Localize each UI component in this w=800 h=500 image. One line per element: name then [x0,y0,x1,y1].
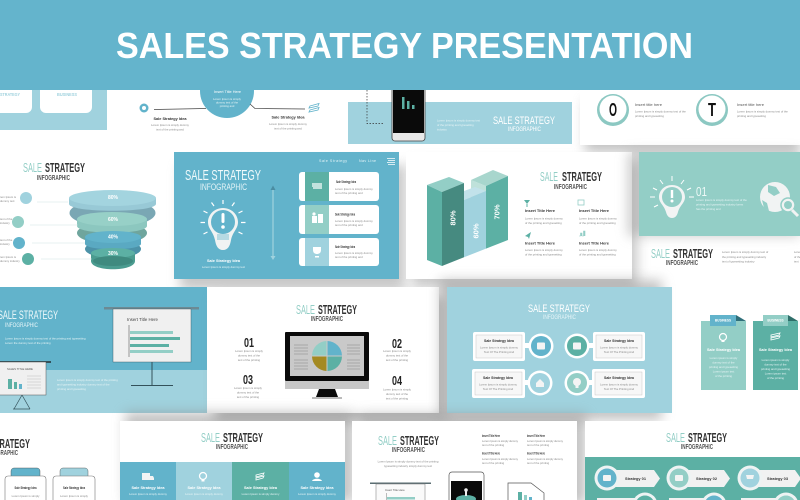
slide: top-center circle diagram: Lorem Ipsum is simply dummy [269,122,307,126]
slide: top phone with light panel: SALE STRATEGY [493,115,555,127]
small projector board: SALES TITLE HERE [7,367,33,371]
slide: phone and document: Insert Title Here [527,434,545,438]
monitor numbered notes: dummy text of the [386,354,409,358]
slide: mint globe slide: 01 [696,184,707,199]
funnel layers [69,190,156,269]
slide: top-left business cards [0,82,107,130]
slide: blue presentation boards: Lorem Ipsum is simply dummy text of the printing and typesetting [5,336,86,340]
funnel layers: 30% [108,251,119,257]
monitor numbered notes: Lorem Ipsum is simply [235,349,264,353]
slide: top-right O and T: Lorem Ipsum is simply dummy text of the [737,110,788,114]
business card 2: Sale Strategy Idea [759,348,793,352]
business cards right [701,315,798,390]
business card 2 [753,315,798,390]
large projector board: Insert Title Here [127,317,159,322]
blue slide cards: text of the printing and [335,255,363,259]
3D bars: 60% [472,223,480,239]
heading block below mint slide: the printing and typesetting industry [722,255,767,259]
slide shadow: mint slide [628,152,800,236]
business card 1: of the printing [715,374,732,378]
business card 1: Sale Strategy Idea [707,348,741,352]
slide: top-center circle diagram: printing and [220,104,235,108]
slide: top-right O and T: printing and typesetting [737,114,766,118]
bars items: Lorem Ipsum is simply dummy [579,216,617,220]
heading block below mint slide: text of typesetting industry [722,260,755,264]
idea box top-right: Text Of The Printing And [604,350,635,354]
slide: phone and document: Lorem Ipsum is simply dummy [527,439,564,443]
slide: blue presentation boards: printing and typesetting [57,387,86,391]
bars items: Lorem Ipsum is simply dummy [579,248,617,252]
blue slide cards: text of the printing and [335,223,363,227]
funnel labels: dummy text [0,199,15,203]
bars title: STRATEGY [562,170,602,184]
monitor numbered notes: dummy text of the [386,392,409,396]
slide: phone and document: Insert Title Here [482,452,500,456]
bars items: of the printing and typesetting [579,252,616,256]
monitor numbered notes: 03 [243,372,253,387]
slide: blue presentation boards: SALE STRATEGY [0,310,58,322]
business card 2: printing and typesetting [761,367,790,371]
monitor numbered notes [234,335,412,400]
slide shadow: monitor slide [215,295,445,421]
strategy 03 [738,466,800,490]
slide: blue presentation boards: and typesetting industry dummy text of the [57,382,110,386]
monitor title: INFOGRAPHIC [311,316,343,323]
slide: light blue four idea boxes [447,287,672,413]
slide: phone and document: INFOGRAPHIC [392,447,425,454]
slide shadow: top right [585,100,800,152]
blue slide nav: Sale Strategy [319,159,347,163]
blue slide cards: Lorem Ipsum is simply dummy [335,251,373,255]
funnel labels: industry [0,221,10,225]
monitor title: STRATEGY [318,303,357,317]
slide: phone and document: text of the printing [482,443,505,447]
funnel layers: 80% [108,195,119,201]
slide: top-right O and T: T [708,100,716,120]
monitor title [296,303,357,323]
monitor numbered notes: 04 [392,373,403,388]
slide: mint globe slide: Lorem Ipsum is simply dummy text of the [696,198,747,202]
blue slide cards: Sale Strategy Idea [336,180,357,184]
idea box bottom-right: Sale Strategy Idea [604,376,635,380]
idea box bottom-right: Lorem Ipsum is simply dummy [600,382,638,386]
funnel title [23,161,85,182]
idea box bottom-left: Sale Strategy Idea [483,376,514,380]
slide: top-center circle diagram: text of the printing and [274,126,302,130]
slide: light blue four idea boxes: SALE STRATEGY [528,303,590,315]
slide: mint globe slide: has the printing and [696,207,721,211]
slide: top phone with light panel [348,85,572,144]
funnel labels: text of the [0,238,13,242]
slide: top-right O and T: O [609,100,617,120]
heading block below mint slide [651,247,800,267]
slide: top-right O and T: Insert title here [635,103,662,107]
slide: top phone with light panel: Lorem Ipsum is simply dummy text [437,118,480,122]
monitor numbered notes: text of the printing [237,395,260,399]
bars items [524,200,617,256]
slide: phone and document: Lorem Ipsum is simply dummy [482,457,519,461]
strip column 4: Sale Strategy Idea [300,486,334,490]
monitor numbered notes: 01 [244,335,254,350]
large projector board [104,307,199,386]
funnel labels: industry [0,242,10,246]
strip column 1: Sale Strategy Idea [132,486,165,490]
slide: bottom-left cards: Lorem Ipsum is simply [60,494,89,498]
bars items: of the printing and typesetting [579,221,616,225]
monitor numbered notes: Lorem Ipsum is simply [383,388,412,392]
bars title [540,170,602,191]
idea box bottom-left: Lorem Ipsum is simply dummy [479,382,517,386]
slide: four column strip [120,421,345,500]
slide: teal strategy arrows [585,421,800,500]
icon: globe and magnifier [760,182,798,216]
slide: bottom-left cards: Sale Strategy Idea [63,486,86,490]
slide: top-right O and T: printing and typesetting [635,114,664,118]
monitor numbered notes: text of the printing [386,396,409,400]
slide shadow: phone slide [358,414,586,500]
header banner [0,0,800,90]
monitor numbered notes: 02 [392,336,402,351]
idea box top-right: Sale Strategy Idea [604,339,635,343]
slide: light blue four idea boxes: INFOGRAPHIC [543,314,576,321]
slide: phone and document: text of the printing [527,443,550,447]
business card 1: dummy text of the [712,360,735,364]
business card 2: Lorem ipsum text [765,372,786,376]
slide: teal strategy arrows: STRATEGY [688,431,727,445]
idea box bottom-left [472,369,552,398]
slide: top-right O and T: Insert title here [737,103,764,107]
strip column 1: Lorem Ipsum is simply dummy [129,492,167,496]
blue slide title [185,167,261,193]
slide: phone and document: Lorem Ipsum is simply dummy [527,457,564,461]
slide: funnel chart [0,161,156,269]
bars items: Insert Title Here [579,242,609,246]
funnel title: STRATEGY [45,161,85,175]
title: SALES STRATEGY PRESENTATION [116,25,693,66]
heading block below mint slide: Lorem Ipsum is simply dummy text of [722,250,768,254]
bars items: Lorem Ipsum is simply dummy [525,216,563,220]
funnel layers: 60% [108,217,119,223]
slide: phone and document [352,421,577,500]
funnel title: SALE [23,161,42,175]
slide: monitor infographic [207,287,439,413]
funnel labels: text of the [0,217,13,221]
strategy 01 [594,466,660,490]
slide: top-center circle diagram: text of the printing and [156,128,184,132]
heading block below mint slide: SALE [651,247,670,261]
heading block below mint slide: STRATEGY [673,247,713,261]
strategy 02: Strategy 02 [696,477,717,481]
slide: phone and document: STRATEGY [400,434,439,448]
blue slide cards: Lorem Ipsum is simply dummy [335,187,373,191]
business card 2: Lorem ipsum is simply [762,358,790,362]
strip column 3: Sale Strategy Idea [244,486,278,490]
business card 2: BUSINESS [767,318,784,322]
funnel labels: rem Ipsum is [0,255,17,259]
business card 1: BUSINESS [715,318,731,322]
bars items: Insert Title Here [525,209,555,213]
business card 1 [701,315,746,390]
bars items: Insert Title Here [579,209,609,213]
strip column 4 [289,462,345,500]
funnel labels [0,192,92,265]
slide: phone and document: Lorem Ipsum is simply dummy [482,439,519,443]
monitor numbered notes: dummy text of the [238,354,261,358]
3D bars [427,170,508,266]
business card 2: of the printing [767,376,784,380]
second row of arrows [597,492,798,500]
slide: top phone with light panel: INFOGRAPHIC [508,126,541,133]
idea box top-right: Lorem Ipsum is simply dummy [600,346,638,350]
slide: top-right O and T [580,85,800,145]
slide: phone and document: text of the printing [527,461,550,465]
strip column 3 [232,462,289,500]
slide: phone and document: Insert Title Here [482,434,500,438]
slide: top-center circle diagram: dummy text of the [216,100,239,104]
bars title: SALE [540,170,558,184]
arrow line [270,186,276,260]
business card 1: Lorem ipsum text [713,370,734,374]
monitor title: SALE [296,303,315,317]
idea box bottom-right [564,369,645,398]
bars title: INFOGRAPHIC [554,184,587,191]
slide: top-center circle diagram: Lorem Ipsum is simply [213,97,242,101]
business card 2: dummy text of the [764,362,787,366]
slide: mint globe slide [639,152,800,236]
blue slide cards: text of the printing and [335,191,363,195]
slide: top phone with light panel: of the printing and typesetting [437,123,474,127]
strip column 4: Lorem Ipsum is simply dummy [298,492,336,496]
slide: bottom-left cards [0,437,95,500]
slide shadow: bottom strips [125,412,353,500]
strategy 03: Strategy 03 [767,477,788,481]
slide: teal strategy arrows: SALE [666,431,685,445]
blue slide nav [319,158,395,164]
small projector board [0,361,51,409]
idea box top-left: Sale Strategy Idea [484,339,515,343]
blue slide title: SALE STRATEGY [185,167,261,184]
idea box bottom-right: Text Of The Printing And [604,387,635,391]
slide: bottom-left cards: Lorem Ipsum is simply [12,494,40,498]
funnel layers: 40% [108,234,119,240]
projector board: Insert Title Here [385,488,405,492]
slide: bottom-left cards: Sale Strategy Idea [14,486,37,490]
slide: top-left business cards: BUSINESS [57,92,77,97]
slide: phone and document: typesetting industry simply dummy text [384,464,432,468]
monitor numbered notes: dummy text of the [237,390,260,394]
business card 1: printing and typesetting [709,365,738,369]
funnel labels: rem Ipsum is [0,195,17,199]
slide shadow: isometric bars slide [412,162,637,287]
blue slide cards: Lorem Ipsum is simply dummy [335,219,373,223]
slide: four column strip: INFOGRAPHIC [216,444,248,451]
slide: isometric bar chart [406,152,632,279]
slide: teal strategy arrows: INFOGRAPHIC [681,444,713,451]
bars items: Lorem Ipsum is simply dummy [525,248,563,252]
slide: blue lightbulb infographic: Sale Strategy Idea [207,259,241,263]
idea box top-right [564,332,645,361]
slide: four column strip: STRATEGY [223,431,263,445]
blue slide nav: Nav Line [359,159,376,163]
slide: top-center circle diagram: Insert Title Here [214,90,241,94]
slide: top-left business cards: STRATEGY [0,92,20,97]
bars items: of the printing and typesetting [525,221,562,225]
icon: small lightbulb [650,176,694,218]
icon: lightbulb [200,200,246,250]
slide: top-center circle diagram: Lorem Ipsum is simply dummy [151,123,189,127]
blue slide cards: Sale Strategy Idea [335,212,356,216]
slide: top phone with light panel: industry [437,128,447,132]
icon: document chart [508,483,544,500]
slide: four column strip: SALE [201,431,220,445]
bars items: of the printing and typesetting [525,252,562,256]
slide: mint globe slide: printing and typesetting industry lorem [696,202,744,206]
slide: top-center circle diagram [140,64,319,132]
slide: phone and document: Insert Title Here [527,452,545,456]
slide: phone and document: Lorem Ipsum is simply dummy text of the printing [378,460,439,464]
blue slide cards: Sale Strategy Idea [335,245,356,249]
slide: blue lightbulb infographic: Lorem Ipsum is simply dummy text [202,265,245,269]
strip column 1 [120,462,176,500]
strategy 02 [666,466,730,490]
monitor numbered notes: text of the printing [238,358,261,362]
3D bars: 80% [448,210,458,226]
strip column 3: Lorem Ipsum is simply dummy [242,492,280,496]
idea box bottom-left: Text Of The Printing And [483,387,514,391]
idea box top-left [473,332,554,361]
blue slide cards [299,172,379,266]
projector board [370,482,431,500]
slide: blue presentation boards [0,287,207,413]
slide: blue presentation boards: Lorem the dummy text of the printing [5,341,51,345]
slide shadow: light blue slide [440,280,662,420]
idea box top-left: Lorem Ipsum is simply dummy [480,346,518,350]
slide: top-right O and T: Lorem Ipsum is simply dummy text of the [635,110,686,114]
heading block below mint slide: text [794,260,799,264]
bars items: Insert Title Here [525,242,555,246]
monitor numbered notes: Lorem Ipsum is simply [234,386,263,390]
slide: phone and document: SALE [378,434,397,448]
monitor numbered notes: Lorem Ipsum is simply [383,349,412,353]
funnel labels: dummy industry [0,259,20,263]
icon: monitor [285,332,369,398]
3D bars: 70% [492,204,502,220]
strip column 2: Lorem Ipsum is simply dummy [185,492,223,496]
slide: top-center circle diagram: Sale Strategy Idea [154,117,187,121]
strip column 2: Sale Strategy Idea [188,486,221,490]
icon: phone [449,472,484,500]
strip column 2 [176,462,232,500]
strategy 01: Strategy 01 [625,477,646,481]
slide: phone and document: text of the printing [482,461,505,465]
funnel title: INFOGRAPHIC [37,175,70,182]
slide: top-center circle diagram: Sale Strategy Idea [272,116,305,120]
slide: blue lightbulb infographic [174,152,399,279]
heading block below mint slide: INFOGRAPHIC [666,260,698,267]
slide shadow: blue slide [180,165,405,290]
slide: blue presentation boards: Lorem Ipsum is simply dummy text of the printing [57,378,118,382]
blue slide title: INFOGRAPHIC [200,182,247,193]
idea box top-left: Text Of The Printing And [484,350,515,354]
slide: blue presentation boards: INFOGRAPHIC [5,322,38,329]
monitor numbered notes: text of the printing [386,358,409,362]
business card 1: Lorem ipsum is simply [710,356,738,360]
